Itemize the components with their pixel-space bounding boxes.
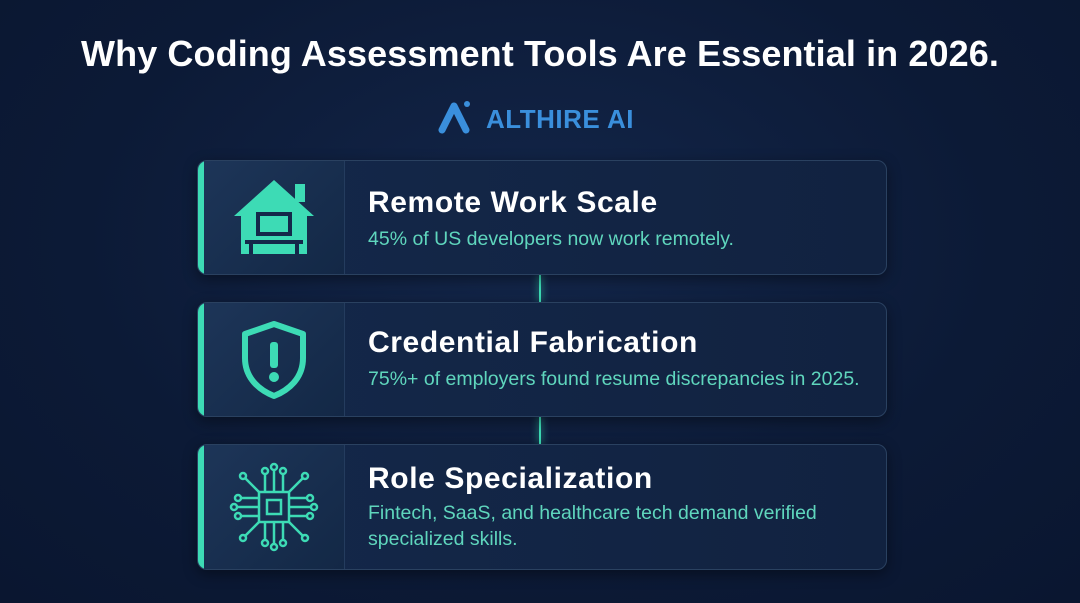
icon: house	[204, 161, 345, 274]
connector 1	[539, 274, 541, 302]
text: 75%+ of employers found resume discrepancies in 2025.	[368, 368, 860, 390]
logo	[438, 101, 634, 134]
panel: role	[197, 444, 887, 570]
panel: credential	[197, 302, 887, 417]
text	[368, 502, 817, 550]
connector 2	[539, 416, 541, 444]
heading: Role Specialization	[368, 462, 653, 495]
text: specialized skills.	[368, 528, 518, 550]
heading: Remote Work Scale	[368, 186, 658, 219]
text: Fintech, SaaS, and healthcare tech demand verified	[368, 502, 817, 524]
logo: ALTHIRE AI	[486, 104, 634, 134]
panel: remote work	[197, 160, 887, 275]
icon: chip	[204, 445, 345, 569]
icon: shield	[204, 303, 345, 416]
heading: Credential Fabrication	[368, 326, 698, 359]
text: 45% of US developers now work remotely.	[368, 228, 734, 250]
title: Why Coding Assessment Tools Are Essential in 2026.	[81, 33, 999, 74]
